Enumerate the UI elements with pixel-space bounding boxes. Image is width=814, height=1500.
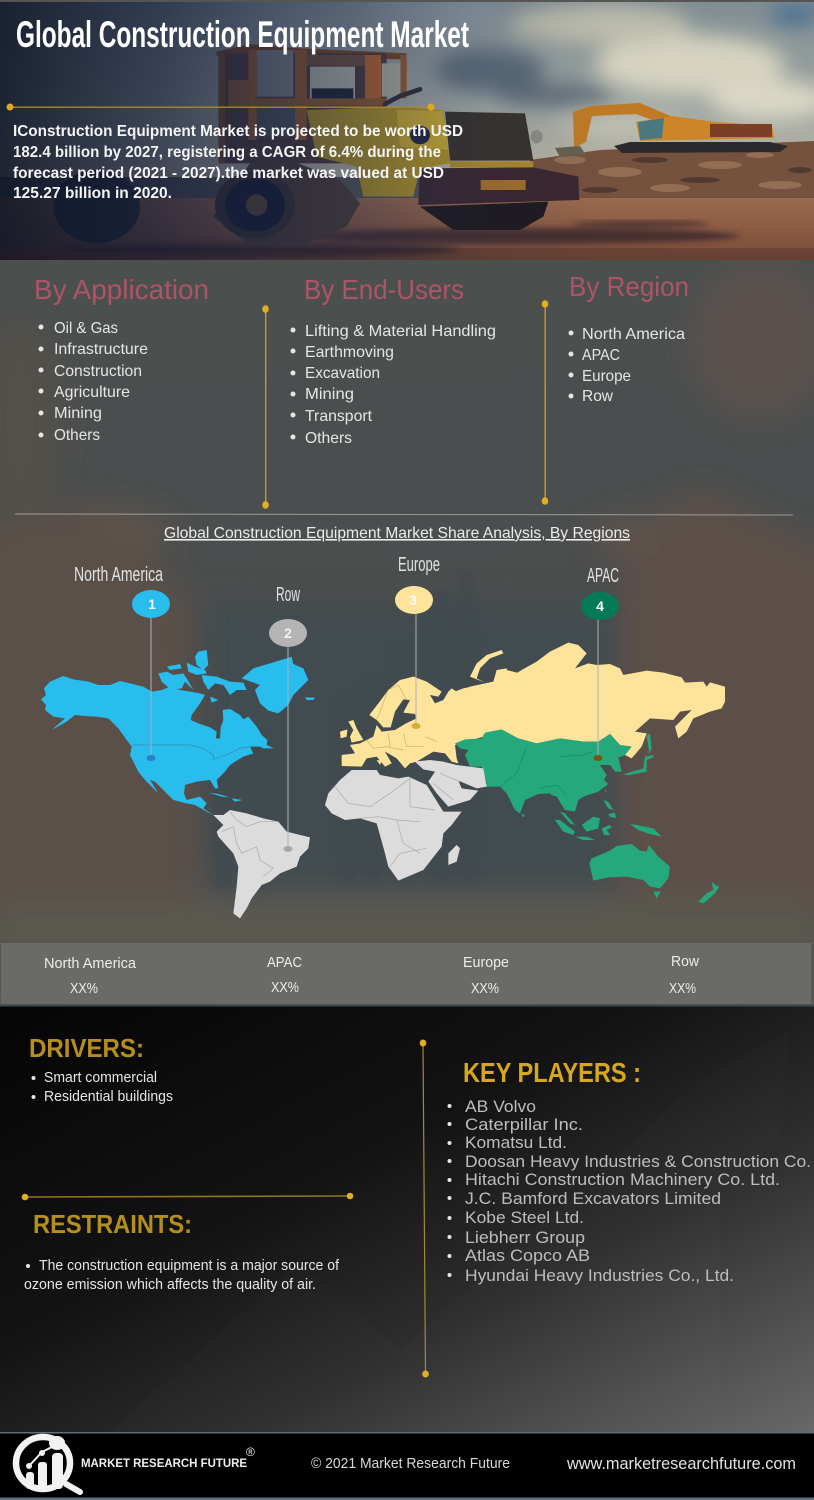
share: row xyxy=(669,954,700,997)
list: key players: Doosan Heavy Industries & Construction Co. xyxy=(465,1153,811,1171)
heading: by end-users: By End-Users xyxy=(304,274,464,305)
list: end-users: Mining xyxy=(305,386,354,403)
gold divider: end-users / region xyxy=(542,300,548,505)
hero description text xyxy=(13,123,463,202)
dark overlay xyxy=(0,2,546,260)
list: key players: Liebherr Group xyxy=(465,1229,585,1247)
pin: north america: North America xyxy=(74,564,164,586)
pin: apac xyxy=(581,565,619,761)
icon: wheel loader xyxy=(53,44,579,247)
list: region: Row xyxy=(582,388,613,405)
pin: europe xyxy=(395,554,440,729)
map region: europe and russia xyxy=(340,643,725,768)
hero description text: IConstruction Equipment Market is projected to be worth USD xyxy=(13,123,463,140)
icon: excavator xyxy=(555,103,788,157)
list: end-users: Transport xyxy=(305,408,373,425)
list: drivers xyxy=(32,1070,173,1105)
list: drivers: Smart commercial xyxy=(44,1070,157,1086)
panel: by end-users xyxy=(290,274,496,447)
list: end-users: Lifting & Material Handling xyxy=(305,323,496,340)
list: application: Agriculture xyxy=(54,384,130,401)
list: region xyxy=(568,326,685,405)
share: row: XX% xyxy=(669,981,696,997)
list: key players: Hitachi Construction Machinery Co. Ltd. xyxy=(465,1171,780,1189)
list: end-users: Others xyxy=(305,430,352,447)
brand name: MARKET RESEARCH FUTURE xyxy=(81,1458,247,1470)
hero description text: 125.27 billion in 2020. xyxy=(13,185,172,202)
share: europe xyxy=(463,955,509,997)
list: key players: Atlas Copco AB xyxy=(465,1247,590,1265)
restraints text xyxy=(24,1258,340,1293)
hero description text: 182.4 billion by 2027, registering a CAGR of 6.4% during the xyxy=(13,144,441,161)
gold divider: drivers / restraints xyxy=(22,1193,353,1200)
map region: north america xyxy=(41,650,315,815)
list: drivers: Residential buildings xyxy=(44,1089,173,1105)
chart title: Global Construction Equipment Market Share Analysis, By Regions xyxy=(164,525,630,542)
share: apac: XX% xyxy=(271,980,299,996)
title: Global Construction Equipment Market xyxy=(16,14,469,55)
list: application: Construction xyxy=(54,363,142,380)
heading: drivers: DRIVERS: xyxy=(29,1033,144,1063)
map region: rest of world xyxy=(213,760,487,918)
pin: apac: 4 xyxy=(596,598,604,614)
dirt mound and ground xyxy=(0,141,814,260)
list: region: North America xyxy=(582,326,685,343)
share: row: Row xyxy=(671,954,700,970)
pin: north america xyxy=(74,564,170,761)
website url: www.marketresearchfuture.com xyxy=(566,1454,796,1473)
list: end-users: Earthmoving xyxy=(305,344,394,361)
list: key players: AB Volvo xyxy=(465,1098,536,1116)
list: key players: Hyundai Heavy Industries Co., Ltd. xyxy=(465,1267,734,1285)
share: europe: XX% xyxy=(471,981,499,997)
panel: drivers xyxy=(29,1033,173,1105)
heading: by application: By Application xyxy=(34,274,209,305)
registered mark: ® xyxy=(246,1445,255,1459)
hero description text: forecast period (2021 - 2027).the market was valued at USD xyxy=(13,165,444,182)
heading: by region: By Region xyxy=(569,271,689,302)
list: region: APAC xyxy=(582,347,620,364)
world map xyxy=(41,554,725,918)
list: application: Others xyxy=(54,427,100,444)
list: application xyxy=(38,320,148,444)
list: key players xyxy=(448,1098,811,1285)
list: key players: Kobe Steel Ltd. xyxy=(465,1209,584,1227)
pin: apac: APAC xyxy=(587,565,619,587)
list: end-users: Excavation xyxy=(305,365,380,382)
pin: row: Row xyxy=(276,584,300,606)
pin: row xyxy=(269,584,307,852)
list: application: Infrastructure xyxy=(54,341,148,358)
share: north america: XX% xyxy=(70,981,98,997)
gold divider: hero xyxy=(6,104,434,110)
list: key players: Caterpillar Inc. xyxy=(465,1116,583,1134)
share: apac: APAC xyxy=(267,955,302,971)
panel: drivers restraints key players background xyxy=(0,1006,814,1432)
share: north america: North America xyxy=(44,956,137,972)
list: key players: Komatsu Ltd. xyxy=(465,1134,567,1152)
list: region: Europe xyxy=(582,368,631,385)
pin: row: 2 xyxy=(284,625,292,641)
panel: segmentation and map background xyxy=(0,260,814,1005)
panel: by application xyxy=(34,274,209,444)
panel: restraints xyxy=(24,1209,340,1293)
pin: north america: 1 xyxy=(148,596,156,612)
list: application: Mining xyxy=(54,405,102,422)
panel: by region xyxy=(568,271,689,405)
restraints text: ozone emission which affects the quality of air. xyxy=(24,1277,316,1293)
list: key players: J.C. Bamford Excavators Limited xyxy=(465,1190,721,1208)
panel: key players xyxy=(448,1057,811,1285)
restraints text: The construction equipment is a major source of xyxy=(39,1258,340,1274)
share: north america xyxy=(44,956,137,997)
heading: restraints: RESTRAINTS: xyxy=(33,1209,192,1239)
hero photo panel xyxy=(0,2,814,260)
gold divider: vertical xyxy=(420,1040,429,1378)
pin: europe: 3 xyxy=(409,592,417,608)
list: end-users xyxy=(290,323,496,447)
gold divider: application / end-users xyxy=(262,305,269,509)
panel: regional share strip xyxy=(1,943,811,1004)
logo: market research future xyxy=(16,1436,80,1492)
list: application: Oil & Gas xyxy=(54,320,118,337)
map region: asia pacific xyxy=(455,729,719,903)
footer bar xyxy=(0,1432,814,1500)
pin: europe: Europe xyxy=(398,554,440,576)
sky with clouds xyxy=(0,2,814,177)
copyright: © 2021 Market Research Future xyxy=(311,1455,510,1472)
share: europe: Europe xyxy=(463,955,509,971)
heading: key players: KEY PLAYERS : xyxy=(463,1057,641,1088)
share: apac xyxy=(267,955,302,996)
